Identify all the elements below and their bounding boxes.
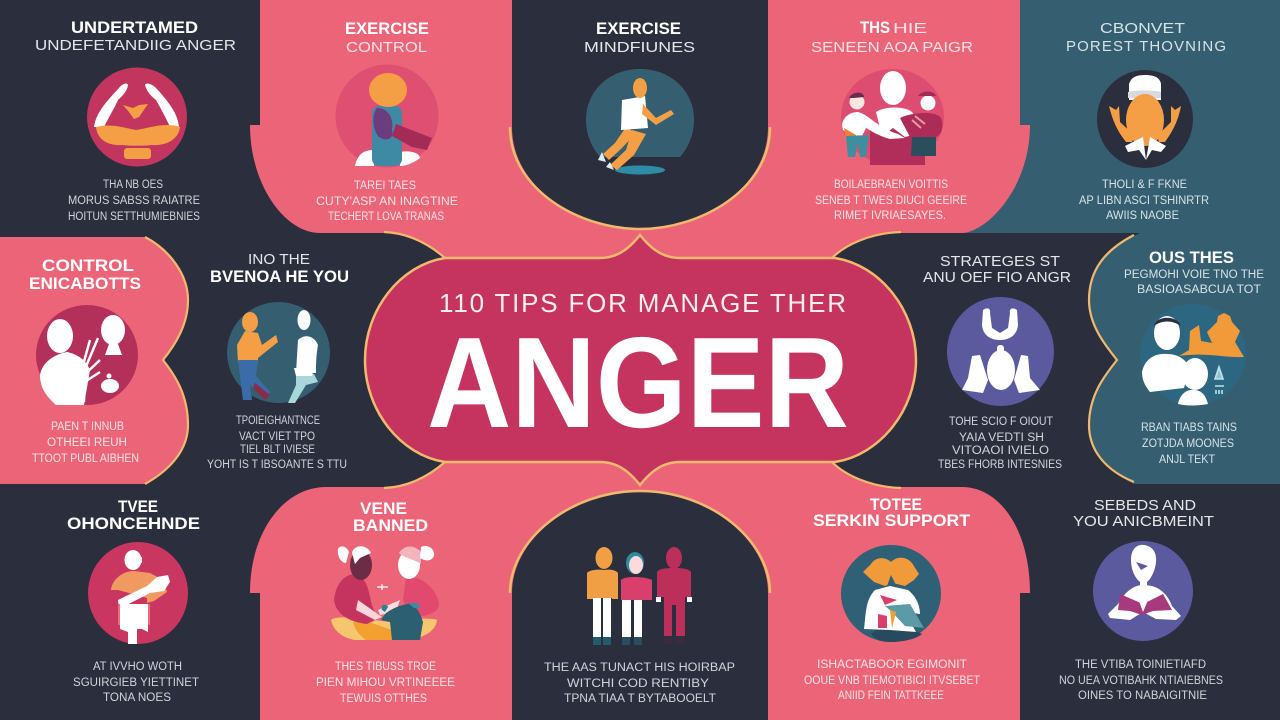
body text	[1141, 422, 1237, 466]
body text: MORUS SABSS RAIATRE	[68, 195, 200, 207]
body text: AT IVVHO WOTH	[93, 661, 182, 673]
body text: TOHE SCIO F OIOUT	[949, 416, 1053, 428]
panel: convert thoughts	[1066, 20, 1226, 222]
body text	[1059, 659, 1223, 702]
heading: UNDEFETANDIIG ANGER	[35, 37, 236, 54]
body text: RBAN TIABS TAINS	[1141, 422, 1237, 434]
heading: BVENOA HE YOU	[210, 268, 349, 286]
heading: CBONVET	[1100, 20, 1185, 37]
body text: OINES TO NABAIGITNIE	[1078, 690, 1207, 702]
panel: seeds and encouragement	[1059, 497, 1223, 702]
panel shape: dark strategies band	[832, 233, 1140, 486]
body text	[938, 416, 1062, 471]
figure: crimson	[656, 547, 692, 644]
heading: EXERCISE	[596, 20, 681, 38]
body text: RIMET IVRIAESAYES.	[834, 210, 946, 222]
heading: BANNED	[353, 517, 428, 535]
heading: OUS THES	[1149, 249, 1234, 267]
body text: SGUIRGIEB YIETTINET	[73, 677, 199, 689]
heading	[67, 498, 200, 533]
heading	[811, 19, 973, 56]
body text: AP LIBN ASCI TSHINRTR	[1079, 195, 1209, 207]
body text: TIEL BLT IVIESE	[240, 444, 315, 456]
body text: OTHEEI REUH	[47, 437, 127, 449]
figure: pink	[621, 552, 652, 645]
icon: three people	[841, 69, 944, 165]
icon: two silhouettes	[36, 305, 138, 405]
icon: busts and orange figure	[1140, 304, 1246, 406]
icon: two people and basket	[331, 546, 439, 640]
heading	[29, 257, 141, 293]
heading: HIE	[893, 20, 927, 37]
gold edge: bottom arch	[510, 491, 770, 593]
body text: AWIIS NAOBE	[1106, 210, 1179, 222]
gold edge: top arch	[510, 127, 770, 229]
heading	[1066, 20, 1226, 55]
body text: THE VTIBA TOINIETIAFD	[1075, 659, 1206, 671]
heading	[345, 20, 429, 56]
title line: anger: ANGER	[427, 311, 849, 455]
body text: HOITUN SETTHUMIEBNIES	[68, 211, 200, 223]
gold edges: bottom pink band	[384, 462, 901, 488]
icon: two people embracing	[841, 545, 941, 642]
panel: understanding anger	[35, 19, 236, 223]
body text: TPOIEIGHANTNCE	[236, 415, 320, 427]
panel shape: top pink band	[250, 0, 1030, 258]
body text: TECHERT LOVA TRANAS	[328, 211, 444, 223]
body text	[73, 661, 199, 704]
heading: MINDFIUNES	[584, 39, 695, 56]
panel: exercise mindfulness	[584, 20, 695, 174]
body text	[32, 421, 139, 465]
icon: person reading book	[1093, 541, 1193, 641]
body text: YAIA VEDTI SH	[959, 432, 1044, 444]
heading: POREST THOVNING	[1066, 38, 1226, 55]
body text	[1079, 179, 1209, 222]
gold edge: teal panel	[1089, 235, 1134, 482]
heading: ENICABOTTS	[29, 275, 141, 293]
icon: running figure	[586, 69, 694, 174]
heading: TOTEE	[870, 496, 922, 514]
heading	[210, 251, 349, 286]
heading: EXERCISE	[345, 20, 429, 38]
heading: TVEE	[118, 498, 158, 516]
body text: NO UEA VOTIBAHK NTIAIEBNES	[1059, 675, 1223, 687]
central title banner	[365, 235, 916, 485]
body text: ANIID FEIN TATTKEEE	[838, 690, 944, 702]
heading	[1124, 249, 1264, 296]
body text: TPNA TIAA T BYTABOOELT	[564, 693, 716, 705]
heading: OHONCEHNDE	[67, 515, 200, 533]
body text: ISHACTABOOR EGIMONIT	[817, 659, 967, 671]
heading: CONTROL	[42, 257, 134, 275]
panel: control emotions	[29, 257, 141, 465]
heading: VENE	[360, 500, 407, 518]
panel shape: left pink	[0, 237, 188, 484]
heading	[353, 500, 428, 535]
body text: ZOTJDA MOONES	[1142, 438, 1234, 450]
icon: person with scarf	[336, 64, 438, 168]
icon: chef with hands raised	[1097, 70, 1193, 168]
heading: STRATEGES ST	[940, 253, 1060, 270]
heading	[35, 19, 236, 54]
body text: THE AAS TUNACT HIS HOIRBAP	[544, 662, 735, 674]
body text: THES TIBUSS TROE	[335, 661, 436, 673]
body text: BOILAEBRAEN VOITTIS	[834, 179, 948, 191]
heading	[813, 496, 970, 530]
body text: THOLI & F FKNE	[1102, 179, 1187, 191]
body text: WITCHI COD RENTIBY	[567, 678, 709, 690]
body text: PIEN MIHOU VRTINEEEE	[316, 677, 455, 689]
panel: into the beyond	[207, 251, 349, 471]
figure: orange	[587, 547, 618, 645]
panel shape: top dark arch	[512, 0, 768, 228]
panel: venue banned	[316, 500, 455, 705]
body text: VITOAOI IVIELO	[952, 445, 1049, 457]
heading	[584, 20, 695, 56]
body text: THA NB OES	[103, 179, 163, 191]
heading	[1073, 497, 1214, 530]
panel: seek support	[804, 496, 980, 702]
body text: OOUE VNB TIEMOTIBICI ITVSEBET	[804, 675, 980, 687]
panel: strategies	[923, 253, 1071, 471]
heading: INO THE	[248, 251, 310, 268]
body text	[316, 180, 458, 223]
heading: BASIOASABCUA TOT	[1137, 284, 1261, 296]
body text: ANJL TEKT	[1159, 454, 1215, 466]
body text	[815, 179, 967, 222]
panel: exercise control	[316, 20, 458, 223]
panel shape: bottom pink band	[250, 462, 1030, 720]
body text: SENEB T TWES DIUCI GEEIRE	[815, 195, 967, 207]
body text	[544, 662, 735, 705]
body text: TTOOT PUBL AIBHEN	[32, 453, 139, 465]
panel: overcoming	[67, 498, 200, 704]
heading: THS	[860, 19, 890, 37]
heading: YOU ANICBMEINT	[1073, 513, 1214, 530]
panel shape: teal right column	[960, 0, 1280, 484]
panel shape: bottom dark arch	[512, 492, 768, 720]
body text	[804, 659, 980, 702]
icon: raised hands and face	[87, 68, 187, 166]
body text: PAEN T INNUB	[51, 421, 124, 433]
title line: tips: 110 TIPS FOR MANAGE THER	[439, 288, 846, 318]
heading: SERKIN SUPPORT	[813, 512, 970, 530]
body text: VACT VIET TPO	[239, 431, 315, 443]
heading: CONTROL	[346, 39, 427, 56]
icon: person stretching arm	[88, 542, 188, 644]
body text: CUTY'ASP AN INAGTINE	[316, 196, 458, 208]
panel: people together	[544, 547, 735, 705]
heading: UNDERTAMED	[71, 19, 198, 37]
icon: three standing figures	[587, 547, 692, 645]
icon: two figures facing	[227, 302, 330, 403]
body text	[316, 661, 455, 705]
body text: TEWUIS OTTHES	[340, 693, 427, 705]
heading: PEGMOHI VOIE TNO THE	[1124, 269, 1264, 281]
gold edge: left pink	[145, 237, 188, 484]
heading: SEBEDS AND	[1094, 497, 1196, 514]
body text: TAREI TAES	[354, 180, 416, 192]
body text	[68, 179, 200, 223]
body text: TONA NOES	[103, 692, 171, 704]
heading: ANU OEF FIO ANGR	[923, 269, 1071, 286]
body text: YOHT IS T IBSOANTE S TTU	[207, 459, 347, 471]
body text	[207, 415, 347, 471]
panel: seek a partner	[811, 19, 973, 222]
heading	[923, 253, 1071, 286]
icon: meditation pose	[947, 297, 1054, 406]
panel: our thoughts	[1124, 249, 1264, 466]
body text: TBES FHORB INTESNIES	[938, 459, 1062, 471]
heading: SENEEN AOA PAIGR	[811, 39, 973, 56]
gold edges: top pink band	[384, 232, 901, 258]
